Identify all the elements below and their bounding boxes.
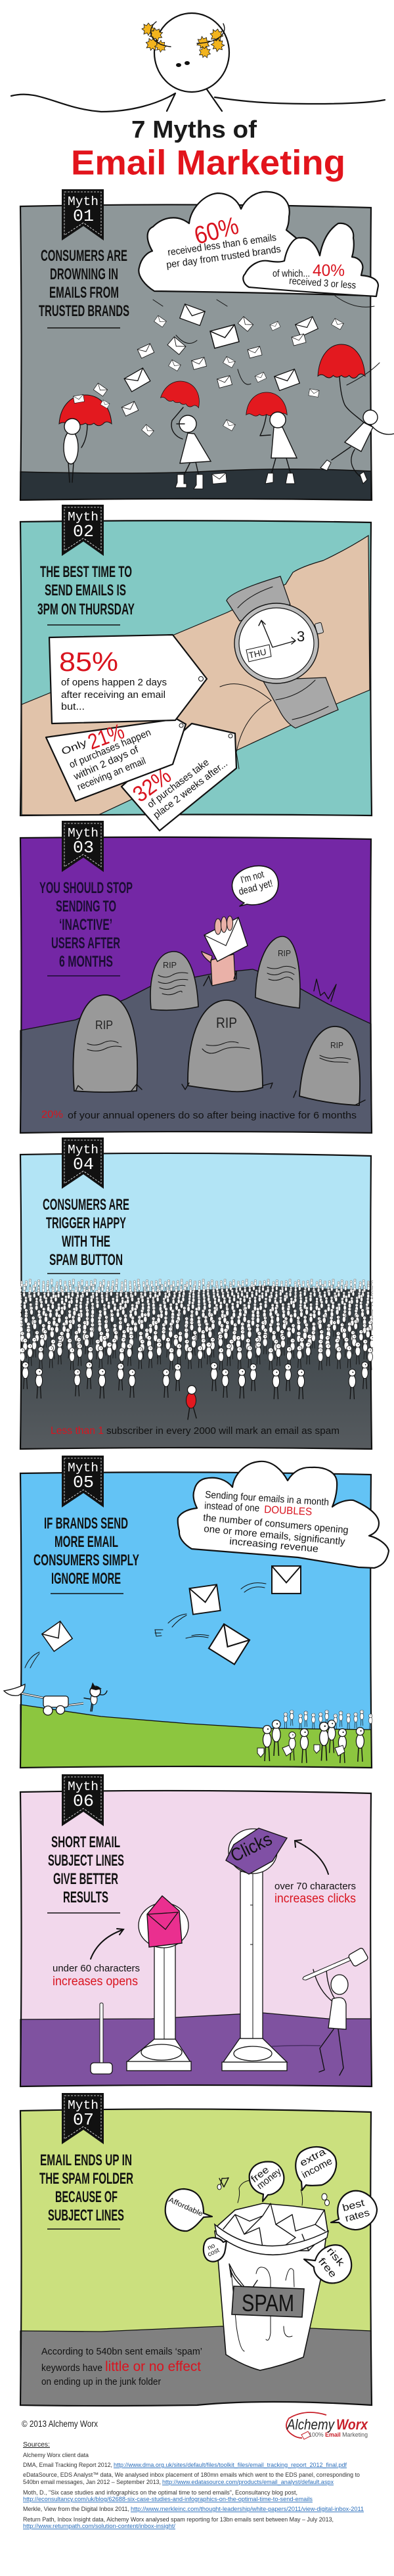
cloud: doubles stat: increasing revenue [229,1536,319,1555]
tombstone front left: RIP [95,1019,113,1032]
sources: eDataSource, EDS Analyst™ data, We analysed inbox placement of 180mn emails which went to the EDS panel, corresponding to [23,2472,360,2478]
sources: http://www.dma.org.uk/sites/default/files/toolkit_files/email_tracking_report_2012_final.pdf [114,2462,347,2468]
badge: myth 04 [62,1138,104,1189]
THU: THU [248,647,267,660]
badge: myth 01: 01 [73,206,94,226]
figure with red umbrella 1 [59,383,112,482]
bubble: extra income: income [300,2155,334,2181]
copyright: © 2013 Alchemy Worx [22,2418,98,2429]
bubble: extra income: extra [298,2146,328,2169]
heading [39,247,129,328]
spam bin [215,2203,328,2370]
panel: myth 03 [20,821,372,1133]
heading: SPAM BUTTON [49,1251,123,1269]
heading: CONSUMERS ARE [43,1196,129,1214]
heading: SUBJECT LINES [48,2207,124,2224]
falling envelopes [121,296,380,484]
sources: Merkle, View from the Digital Inbox 2011, [23,2506,129,2512]
speech bubble: I'm not dead yet [232,866,278,906]
heading: 6 MONTHS [59,953,113,971]
badge: myth 06: 06 [73,1791,94,1811]
hammer on the ground [91,2003,112,2074]
heading: IF BRANDS SEND [44,1515,128,1532]
bubble: best rates: best [341,2197,366,2214]
cloud: 40 percent stat [243,223,378,296]
flying envelopes [25,1566,301,1668]
crowd of subscribers [20,1279,373,1400]
panel: myth 07 [20,2093,377,2406]
heading: BECAUSE OF [55,2188,118,2206]
heading: SUBJECT LINES [48,1852,124,1870]
heading: ‘INACTIVE’ [59,916,112,934]
high striker: clicks [222,1828,287,2071]
logo: Alchemy Worx [286,2412,368,2439]
panel: myth 04 [0,1138,394,1449]
heading: GIVE BETTER [53,1870,118,1888]
logo: Alchemy Worx: 100% Email Marketing [309,2431,368,2439]
stat text: keywords have [41,2362,102,2374]
badge: myth 04: Myth [68,1143,98,1157]
THU [246,645,271,662]
logo: Alchemy Worx: Worx [336,2416,368,2433]
stat text: Less than 1 [51,1425,104,1437]
horizon line and neck [11,89,385,112]
head [154,13,229,92]
heading: THE BEST TIME TO [40,563,132,581]
graveyard hill [20,969,372,1133]
sources: Alchemy Worx client data [23,2452,89,2458]
red figure [186,1385,196,1419]
tombstone front middle [182,1000,273,1092]
received 3 or less: received 3 or less [289,275,357,291]
figure with windswept umbrella 4 [318,344,394,484]
bubble: free money [238,2162,284,2203]
tag: 21 percent: receiving an email [76,755,147,793]
panel: myth 06 [20,1774,372,2086]
heading: CONSUMERS SIMPLY [33,1552,139,1569]
bubble: no cost: cost [207,2247,221,2259]
ground [20,2326,372,2406]
heading: MORE EMAIL [55,1533,118,1551]
tag: 85 percent: after receiving an email [61,689,165,701]
figure with red umbrella 3 [246,392,297,484]
heading: USERS AFTER [51,934,120,952]
bubble: extra income [296,2146,336,2205]
bubble: best rates: rates [344,2207,371,2224]
badge: myth 06: Myth [68,1780,98,1794]
badge: myth 07: 07 [73,2110,94,2130]
badge: myth 02 [62,505,104,556]
tag: 85 percent: 85% [59,647,118,677]
panel: myth 05 [4,1456,389,1768]
cloud: doubles stat: instead of one [204,1500,260,1514]
cloud: 60 percent stat [139,192,368,296]
sources: http://econsultancy.com/uk/blog/62688-six-case-studies-and-infographics-on-the-optimal-time-to-send-emails [23,2496,313,2502]
tombstone back left: RIP [163,960,177,970]
heading [43,1196,129,1274]
tombstone back left [150,952,198,1010]
bubble: Affordable: Affordable [167,2196,204,2219]
figure swinging hammer [272,1947,368,2075]
heading [33,1515,139,1594]
3: 3 [297,628,305,645]
badge: myth 02: Myth [68,510,98,524]
sources: http://www.returnpath.com/solution-content/inbox-insight/ [23,2523,175,2529]
sources [23,2441,364,2529]
tombstone back right: RIP [278,948,291,958]
cloud: 60 percent stat: per day from trusted brands [165,244,282,271]
ground [20,2013,372,2086]
bubble: risk free: free [316,2256,339,2280]
sources: 540bn email messages, Jan 2012 – September 2013, [23,2479,161,2485]
bubble: free money: free [249,2164,271,2185]
heading: EMAILS FROM [49,284,119,302]
speech bubble: I'm not dead yet: dead yet! [238,878,274,898]
label: under 60 characters: under 60 characters [53,1963,140,1974]
pink envelope [147,1896,182,1947]
clicks label: Clicks [227,1829,275,1866]
sources: http://www.edatasource.com/products/email_analyst/default.aspx [162,2479,334,2485]
of which: of which... [273,268,310,279]
tag: 32 percent: of purchases take [145,757,211,810]
heading: EMAIL ENDS UP IN [40,2151,132,2169]
hillside [20,1705,372,1768]
arm [22,536,370,815]
cloud: doubles stat: the number of consumers opening [203,1512,349,1536]
title: Email Marketing [71,143,345,183]
badge: myth 03 [62,821,104,872]
zombie hand with envelope [202,916,336,1001]
clicks envelope [226,1828,287,1874]
SPAM label: SPAM [242,2289,294,2316]
bubble: risk free [304,2245,351,2283]
title: 7 Myths of [131,116,257,143]
bubble: no cost [204,2238,227,2262]
tombstone back right [255,936,300,1008]
tombstone front left [74,995,142,1092]
badge: myth 03: 03 [73,838,94,858]
figure in raincoat with red umbrella 2 [160,377,211,489]
heading: SHORT EMAIL [51,1833,120,1851]
heading: SEND EMAILS IS [45,582,126,599]
left laurel [142,22,171,55]
panel: myth 01 [20,189,394,500]
wristwatch [227,576,338,728]
stat text: subscriber in every 2000 will mark an email as spam [106,1425,339,1437]
heading: CONSUMERS ARE [41,247,127,265]
stat text: of your annual openers do so after being inactive for 6 months [68,1110,357,1121]
badge: myth 07: Myth [68,2098,98,2113]
tag: 85 percent [49,635,207,724]
mascot: stick figure head with laurel wreath [11,13,385,112]
cloud: doubles stat: one or more emails, significantly [204,1523,346,1548]
heading: WITH THE [62,1233,110,1251]
badge: myth 05: Myth [68,1461,98,1475]
flies [217,2178,330,2205]
stat text: on ending up in the junk folder [41,2376,161,2387]
ground [20,469,371,500]
label: over 70 characters: increases clicks [274,1892,356,1906]
cloud: doubles stat: DOUBLES [264,1504,313,1518]
heading: 3PM ON THURSDAY [37,601,135,618]
tag: 85 percent: of opens happen 2 days [61,677,167,688]
heading [47,1833,124,1913]
bubble: no cost: no [207,2242,217,2252]
tombstone front right: RIP [330,1040,343,1050]
tag: 32 percent [121,724,236,831]
badge: myth 01: Myth [68,195,98,209]
sources: http://www.merkleinc.com/thought-leadership/white-papers/2011/view-digital-inbox-2011 [131,2506,364,2512]
label: under 60 characters [53,1963,140,1989]
badge: myth 02: 02 [73,522,94,541]
logo: Alchemy Worx: Alchemy [286,2416,336,2433]
title [71,116,345,183]
40%: 40% [313,262,345,280]
badge: myth 03: Myth [68,826,98,840]
heading [39,879,133,976]
heading: TRUSTED BRANDS [39,302,129,320]
panel: myth 02 [20,505,372,831]
envelopes in the bin [215,2203,328,2255]
badge: myth 01 [62,189,104,241]
tag: 32 percent: place 2 weeks after... [151,758,230,821]
arrow: opens [91,1929,123,1959]
ground [20,1285,372,1449]
bubble: Affordable [165,2189,212,2231]
eyes [176,61,190,67]
stat text: According to 540bn sent emails ‘spam’ [41,2346,202,2357]
heading: RESULTS [63,1889,108,1906]
stat text: received less than 6 emails [167,232,277,258]
badge: myth 05 [62,1456,104,1507]
tag: 85 percent: but... [61,701,85,712]
speech bubble: I'm not dead yet: I'm not [240,869,265,886]
right laurel [194,24,227,60]
heading: TRIGGER HAPPY [46,1214,126,1232]
stat text [41,2346,202,2387]
heading [37,563,135,625]
bubble: free money: money [255,2166,284,2192]
stat text: 20% [41,1109,63,1120]
tag: 21 percent: within 2 days of [72,744,141,783]
tag: 21 percent [46,719,186,801]
sources: Moth, D., "Six case studies and infographics on the optimal time to send emails", Econsultancy blog post, [23,2489,297,2496]
badge: myth 07 [62,2093,104,2144]
tag: 21 percent: 21% [85,719,127,754]
heading: DROWNING IN [50,265,118,283]
cloud: doubles stat: Sending four emails in a month [205,1489,329,1508]
tag: 21 percent: Only [60,737,89,758]
tombstone front middle: RIP [216,1015,237,1031]
60%: 60% [191,212,242,250]
tombstone front right [294,1026,365,1105]
sources: DMA, Email Tracking Report 2012, [23,2462,112,2468]
heading: YOU SHOULD STOP [39,879,133,897]
stat text: little or no effect [105,2359,201,2374]
tag: 32 percent: 32% [128,763,176,807]
heading: THE SPAM FOLDER [39,2170,133,2188]
heading [39,2151,133,2229]
crowd on the hill [257,1710,373,1763]
label: under 60 characters: increases opens [53,1975,138,1989]
label: over 70 characters: over 70 characters [274,1881,356,1892]
bubble: risk free: risk [324,2245,347,2269]
sources: Return Path, Inbox Insight data, Alchemy Worx analysed spam reporting for 13bn emails sent between May – July 2013, [23,2516,334,2523]
tag: 21 percent: of purchases happen [68,727,152,771]
badge: myth 06 [62,1774,104,1826]
sources: Sources: [23,2441,50,2449]
arrow: clicks [295,1840,328,1874]
catapult with devil [4,1682,107,1715]
badge: myth 05: 05 [73,1473,94,1492]
heading: IGNORE MORE [51,1570,121,1588]
bubble: best rates [331,2191,377,2230]
badge: myth 04: 04 [73,1155,94,1174]
cloud: doubles stat [178,1461,389,1568]
high striker: opens [127,1896,191,2071]
label: over 70 characters [274,1881,356,1906]
heading: SENDING TO [56,898,116,915]
